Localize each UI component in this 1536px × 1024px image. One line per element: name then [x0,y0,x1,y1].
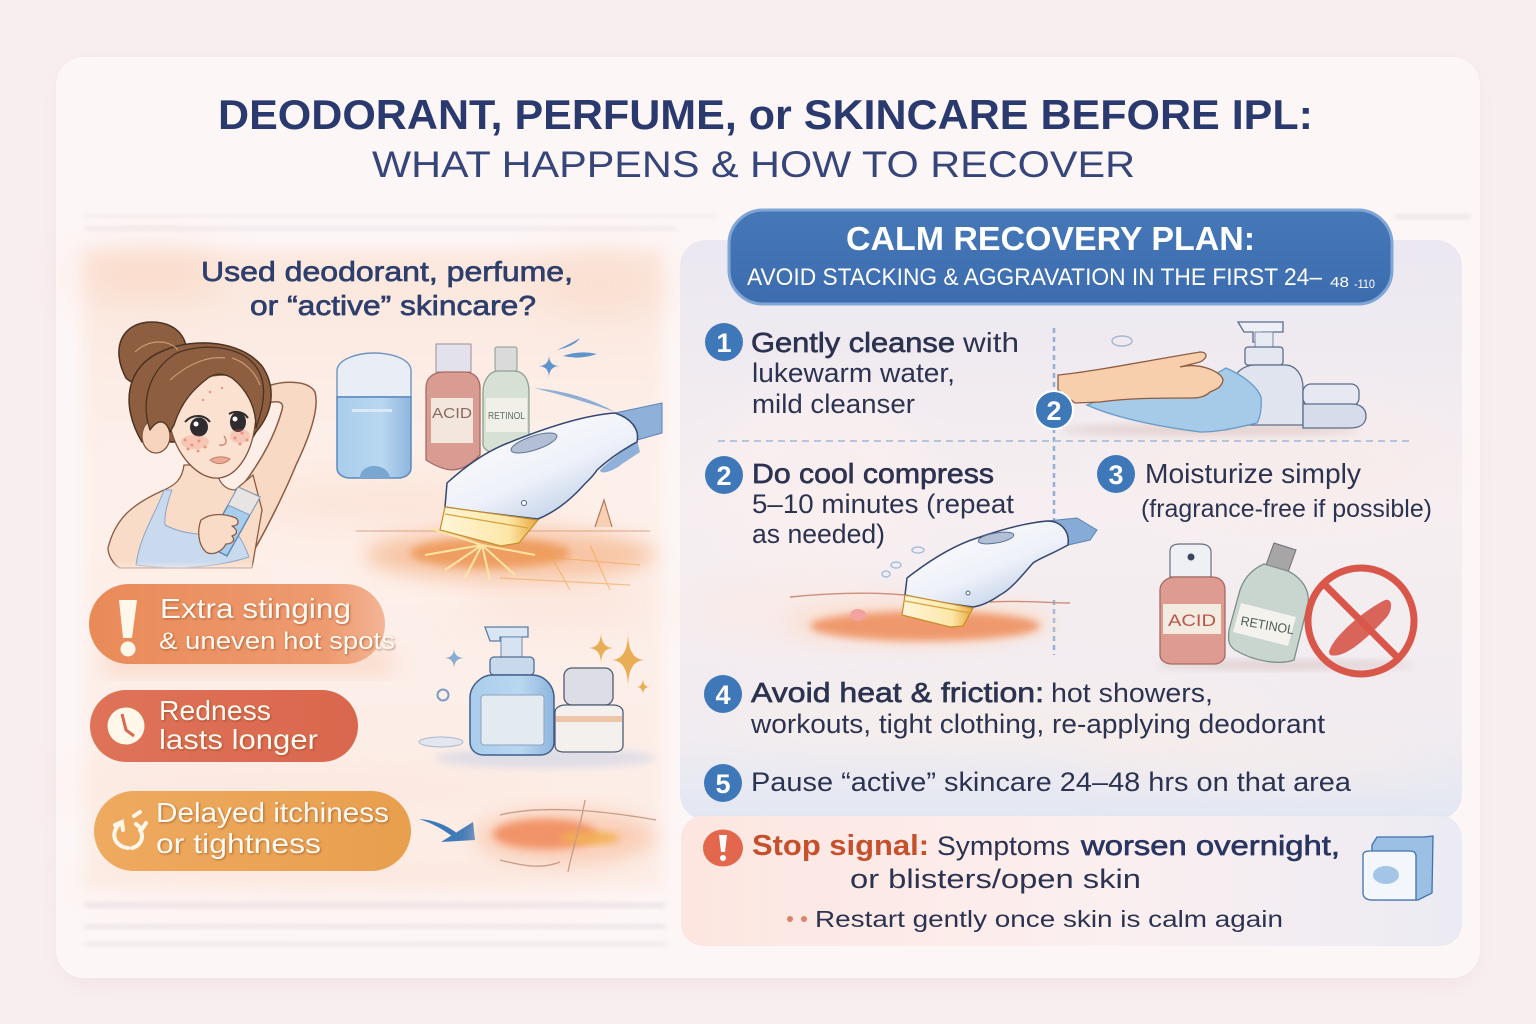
nose and mouth [219,436,226,445]
right panel background [680,240,1462,820]
acid bottle: ACID [1168,611,1216,630]
panel: stop signal: or blisters/open skin [850,864,1141,894]
icon: warning [703,830,743,866]
ear [142,419,170,453]
face [170,375,256,478]
icon: prohibition sign over lipstick [1308,568,1414,674]
icon: acid bottle [426,344,480,470]
tank top [136,490,249,568]
pill: delayed itchiness: Delayed itchiness [156,797,389,828]
banner: 48 [1330,274,1349,291]
banner: -110 [1354,277,1375,291]
left panel background [84,250,662,888]
badge 2 on towel [1035,391,1073,429]
hand [199,514,238,554]
icon: exclamation mark [119,600,137,656]
step 1: 1 [716,328,732,358]
pump bottle [1233,322,1303,425]
step 4: Avoid heat & friction: [751,677,1044,708]
step 2: as needed) [752,519,885,549]
acid bottle [1160,544,1225,664]
step 1: Gently cleanse [751,327,955,358]
hair bun [119,322,186,385]
raised arm [222,382,316,552]
step 5 [704,764,1352,802]
icon: box of wipes [1363,836,1433,900]
illustration: woman applying deodorant [100,322,316,581]
deodorant in hand [206,487,260,556]
divider lines [1053,328,1055,655]
step 1: mild cleanser [752,389,915,419]
icon: cleanser bottle and jar [419,627,655,768]
pill: redness lasts longer [90,690,358,762]
pill: extra stinging: Extra stinging [160,593,351,624]
left question heading: Used deodorant, perfume, [201,256,573,287]
icon: blue sparkles [534,338,615,412]
step 4: hot showers, [1051,678,1213,708]
panel: stop signal [681,816,1462,946]
step 2: 5–10 minutes (repeat [752,489,1015,519]
icon: itch arrows [114,812,146,848]
skin patch: irritated [475,800,656,872]
panel: stop signal: Restart gently once skin is calm again [815,906,1283,932]
icon: IPL device [440,403,662,546]
icon: deodorant stick [337,353,411,478]
step 4: workouts, tight clothing, re-applying deodorant [750,709,1326,739]
panel: recovery plan [680,210,1462,820]
skin patch with hot spot [356,500,655,590]
step 2 [705,456,1015,549]
retinol bottle [1229,543,1308,662]
banner: AVOID STACKING & AGGRAVATION IN THE FIRST 24– [747,264,1323,291]
illustration: hand with towel and cleanser [1058,322,1366,436]
sparkles [588,632,650,695]
left question heading: or “active” skincare? [250,290,536,321]
step 3: 3 [1108,460,1124,490]
step 3: Moisturize simply [1145,458,1361,489]
water drop [1112,336,1132,346]
banner: CALM RECOVERY PLAN: [846,220,1255,257]
icon: clock [108,708,144,744]
step 4: 4 [715,680,731,710]
pill: redness lasts longer: lasts longer [159,724,318,755]
step 3 [1097,455,1432,523]
pill: delayed itchiness [94,791,411,871]
panel: stop signal: Stop signal: [752,830,929,862]
icon: retinol bottle [483,347,529,452]
step 1: with [962,327,1019,358]
pill: redness lasts longer: Redness [159,695,271,726]
step 1: lukewarm water, [752,358,955,388]
arrow [419,819,475,842]
panel: stop signal: Symptoms [937,831,1070,861]
pill: extra stinging: & uneven hot spots [159,628,395,655]
step 2: 2 [716,461,732,491]
icon: acid bottle: ACID [432,406,472,422]
step 1 [705,323,1019,419]
torso [108,465,262,568]
icon: retinol bottle: RETINOL [488,411,525,422]
main heading: DEODORANT, PERFUME, or SKINCARE BEFORE IPL: [218,91,1313,138]
hand [1058,352,1223,403]
front hair [146,347,264,432]
jar [1303,384,1366,428]
illustration: device on irritated skin [785,518,1097,646]
step 4 [704,675,1326,739]
step 3: (fragrance-free if possible) [1141,495,1432,523]
left question heading [201,256,573,321]
step 2: Do cool compress [752,458,994,489]
pill: delayed itchiness: or tightness [156,828,321,859]
banner [729,210,1392,304]
redness on cheeks [181,387,250,452]
title block [218,91,1313,185]
panel: stop signal: worsen overnight, [1080,830,1340,861]
eyes [190,418,208,436]
retinol bottle: RETINOL [1239,613,1295,637]
step 5: 5 [715,769,731,799]
back hair [129,343,271,442]
pill: extra stinging [89,584,395,674]
illustration: acid and retinol to avoid [1155,543,1415,674]
badge 2 on towel: 2 [1046,396,1062,426]
panel: what happens [50,250,670,893]
towel [1087,368,1261,432]
subheading: WHAT HAPPENS & HOW TO RECOVER [372,144,1135,185]
step 5: Pause “active” skincare 24–48 hrs on that area [751,767,1352,797]
